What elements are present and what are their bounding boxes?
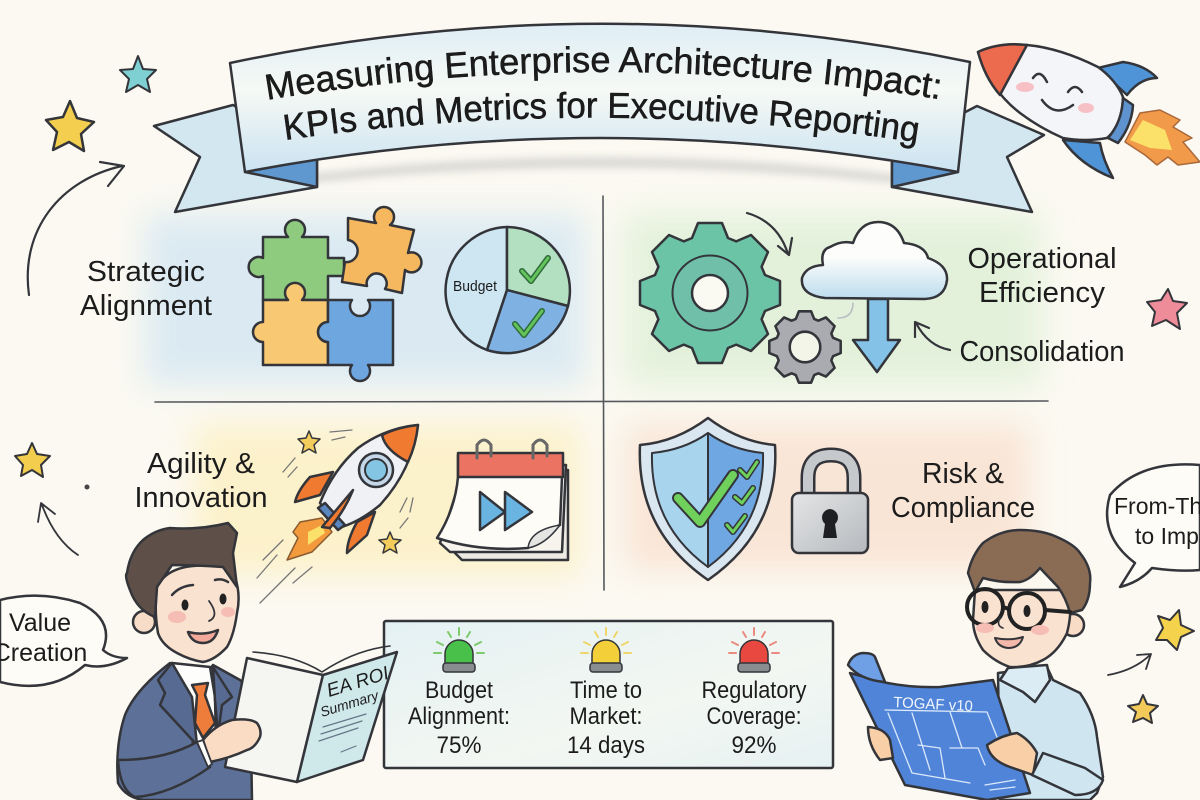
jacket: [117, 663, 252, 800]
pie slice: blue left: [446, 227, 507, 350]
pie checks: [515, 258, 548, 335]
booklet subtitle: Summary: [318, 687, 381, 720]
KPI: budget alignment: [408, 628, 510, 759]
blueprint roll: [848, 653, 885, 682]
icon: shield: [640, 418, 775, 580]
panel box: [384, 621, 833, 768]
label: Strategic Alignment: Strategic: [87, 256, 205, 288]
booklet lines: [319, 714, 366, 752]
icon: down arrow: [853, 299, 900, 372]
center fin: [322, 490, 353, 528]
KPI panel: [384, 621, 833, 768]
icon: pink star: [1147, 289, 1187, 329]
head: [967, 530, 1090, 667]
quadrant divider lines: [155, 196, 1048, 590]
hands: [868, 727, 1037, 775]
KPI: budget alignment: Alignment:: [408, 703, 510, 730]
rocket fins: [1063, 62, 1157, 178]
arrow: gear rotation: [747, 213, 792, 255]
banner: [152, 22, 1046, 214]
label: Risk and Compliance: [891, 458, 1035, 524]
sleeve arm: [118, 742, 210, 797]
booklet title: EA ROI: [324, 663, 392, 702]
booklet: [225, 646, 397, 782]
pie chart: budget: [446, 227, 570, 353]
porthole: [359, 453, 393, 487]
KPI: time to market: 14 days: [567, 732, 645, 759]
body: [320, 425, 418, 528]
ear: [1062, 614, 1084, 636]
left ribbon tail: [154, 105, 317, 212]
facial features: [168, 579, 235, 643]
rings: [477, 440, 547, 458]
icon: left stars and arrow: [15, 443, 90, 555]
speech bubble: Value Creation: Value: [9, 609, 71, 637]
KPI: time to market: Time to: [570, 677, 642, 704]
lapels: [158, 663, 232, 745]
label: Strategic Alignment: Alignment: [80, 290, 212, 322]
light green: [434, 628, 484, 672]
label: Operational Efficiency: Efficiency: [979, 277, 1106, 309]
pie label: Budget: [453, 278, 498, 295]
label: Agility and Innovation: Agility &: [147, 448, 255, 480]
head: [126, 523, 239, 662]
hair: [968, 530, 1090, 613]
blueprint title: TOGAF v10: [893, 694, 973, 715]
header: [458, 453, 563, 477]
label: Strategic Alignment: [80, 256, 212, 322]
icon: small grey gear: [769, 311, 841, 383]
label: Agility and Innovation: [134, 448, 268, 514]
nose cone: [382, 425, 418, 462]
fins: [295, 472, 375, 553]
shirt cuff: [197, 740, 212, 767]
puzzle orange: [342, 207, 421, 293]
speech bubble: From-Theory to Impact: [1107, 464, 1200, 587]
ear: [133, 611, 155, 633]
KPI: regulatory coverage: 92%: [732, 732, 776, 759]
label: Agility and Innovation: Innovation: [134, 482, 268, 514]
fast forward: [480, 492, 532, 530]
rocket body: [978, 44, 1123, 140]
flame: [287, 518, 332, 560]
rocket engine band: [1108, 98, 1133, 143]
blueprint plan lines: [885, 710, 1015, 790]
light red: [729, 628, 779, 672]
KPI: budget alignment: 75%: [436, 732, 482, 759]
rocket nose: [978, 44, 1027, 95]
glasses: [967, 589, 1070, 629]
hand: [203, 719, 261, 762]
label: Risk and Compliance: Compliance: [891, 492, 1035, 524]
facial features: [976, 601, 1049, 648]
KPI: regulatory coverage: [702, 628, 806, 759]
icon: large green gear: [640, 223, 780, 363]
icon: small stars: [298, 431, 401, 553]
shirt: [172, 663, 216, 745]
KPI: time to market: [567, 628, 645, 759]
face: [156, 566, 239, 662]
banner drop shadow: [250, 157, 955, 190]
icon: top-right smiling rocket: [978, 44, 1200, 178]
arrow: to consolidation: [915, 322, 950, 350]
icon: cloud: [802, 222, 947, 299]
label: Operational Efficiency: Operational: [968, 243, 1116, 275]
speed lines: [257, 430, 413, 603]
pie slice: blue lower: [487, 290, 568, 353]
KPI: regulatory coverage: Coverage:: [706, 703, 802, 730]
title: Measuring Enterprise Architecture Impact:: [266, 46, 940, 100]
right ribbon tail: [892, 106, 1044, 212]
rocket flame: [1125, 110, 1200, 165]
sleeve: [1032, 753, 1103, 795]
page: [437, 455, 562, 549]
person: architect with blueprint: [848, 530, 1103, 800]
KPI: budget alignment: Budget: [425, 677, 493, 704]
back pages: [440, 465, 568, 560]
light yellow: [581, 628, 631, 672]
engine band: [318, 503, 345, 530]
collar: [1000, 665, 1050, 702]
arrow: curved up to banner: [28, 162, 124, 295]
rocket face: [1016, 74, 1094, 113]
icon: yellow star: [46, 101, 94, 151]
quadrant background washes: [145, 215, 1040, 575]
icon: lower-right stars and arrow: [1108, 610, 1194, 723]
label: Consolidation: Consolidation: [960, 336, 1124, 368]
hair: [126, 523, 237, 617]
label: Risk and Compliance: Risk &: [922, 458, 1004, 490]
cloud wisp: [838, 303, 853, 318]
person: executive with report: [117, 523, 397, 800]
tie: [192, 683, 215, 738]
blueprint: [848, 653, 1030, 800]
puzzle yellow: [253, 283, 328, 365]
icon: padlock: [792, 455, 868, 553]
puzzle green: [249, 220, 344, 300]
icon: teal star: [120, 56, 156, 92]
KPI: regulatory coverage: Regulatory: [702, 677, 806, 704]
KPI: time to market: Market:: [570, 703, 642, 730]
banner body: [230, 24, 970, 172]
ribbon folds: [245, 155, 958, 187]
face: [973, 590, 1071, 667]
shirt: [998, 667, 1103, 800]
subtitle: KPIs and Metrics for Executive Reporting: [284, 92, 918, 149]
check marks: [678, 462, 757, 532]
icon: puzzle pieces: [249, 207, 421, 381]
page curl: [528, 525, 560, 548]
pie slice: green: [507, 227, 570, 306]
puzzle blue: [318, 300, 393, 381]
icon: calendar: [437, 440, 568, 560]
speech bubble: Value Creation: [0, 596, 127, 686]
icon: launching rocket: [257, 425, 418, 603]
label: Operational Efficiency: [968, 243, 1116, 309]
